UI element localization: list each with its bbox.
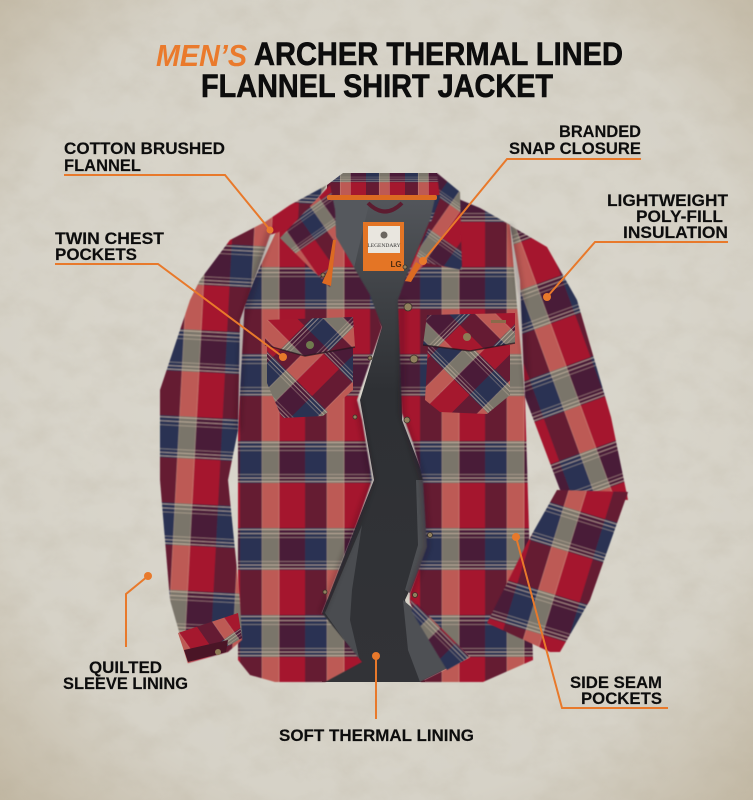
right chest pocket: [423, 313, 515, 414]
callout: soft thermal lining: [279, 652, 474, 745]
jacket body left front: [238, 200, 382, 682]
title line two: FLANNEL SHIRT JACKET: [201, 68, 553, 104]
left chest pocket: [265, 317, 355, 418]
metal snaps: [321, 265, 432, 598]
right hem flap: [410, 597, 470, 670]
collar back band: [327, 173, 450, 197]
orange collar tape: [322, 195, 437, 286]
callout: branded snap closure: [419, 122, 641, 265]
right sleeve upper: [480, 208, 628, 500]
callout: lightweight poly-fill insulation: POLY-FILL: [636, 207, 723, 226]
callout: quilted sleeve lining: QUILTED: [89, 658, 162, 677]
title line one: ARCHER THERMAL LINED: [254, 36, 623, 72]
left cuff: [178, 613, 242, 663]
title: [156, 36, 623, 104]
thermal lining: [322, 198, 470, 682]
callout: cotton brushed flannel: COTTON BRUSHED: [64, 139, 225, 158]
size label: LG: [390, 260, 402, 269]
flannel jacket illustration: [160, 173, 628, 682]
left sleeve: [160, 185, 327, 663]
callout: cotton brushed flannel: FLANNEL: [64, 156, 141, 175]
size label: LEGENDARY: [367, 243, 401, 249]
callout: twin chest pockets: TWIN CHEST: [55, 229, 165, 248]
callout: twin chest pockets: [55, 229, 287, 361]
callout: quilted sleeve lining: SLEEVE LINING: [63, 674, 188, 693]
jacket body right front: [398, 190, 533, 682]
right sleeve lower: [487, 490, 628, 652]
garment seam shadows: [238, 225, 527, 613]
callout: twin chest pockets: POCKETS: [55, 245, 137, 264]
callout: branded snap closure: BRANDED: [559, 122, 641, 141]
callout: branded snap closure: SNAP CLOSURE: [509, 139, 641, 158]
size label: [363, 222, 404, 271]
callout: soft thermal lining: SOFT THERMAL LINING: [279, 726, 474, 745]
callout: quilted sleeve lining: [63, 572, 188, 693]
callout: lightweight poly-fill insulation: LIGHTWEIGHT: [607, 191, 729, 210]
title accent word: MEN’S: [156, 38, 247, 73]
callout: side seam pockets: [512, 533, 668, 708]
callout: lightweight poly-fill insulation: [543, 191, 729, 301]
callout: cotton brushed flannel: [64, 139, 274, 234]
callout: side seam pockets: SIDE SEAM: [570, 673, 662, 692]
callout: side seam pockets: POCKETS: [581, 689, 662, 708]
left collar flap: [280, 185, 336, 287]
callout: lightweight poly-fill insulation: INSULATION: [623, 223, 728, 242]
right collar flap: [405, 173, 462, 282]
hanger loop: [368, 203, 402, 212]
